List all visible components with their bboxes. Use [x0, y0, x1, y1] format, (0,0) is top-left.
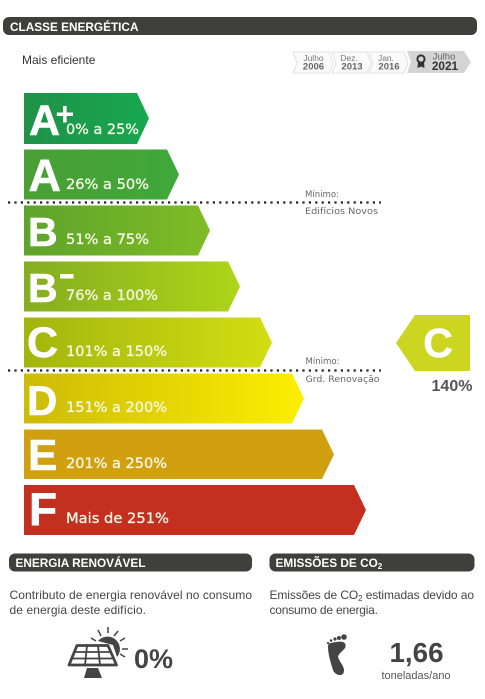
bar C: [24, 318, 272, 368]
minimum label: edifícios novos: [305, 190, 378, 217]
bar A: 26% a 50%: [66, 177, 149, 193]
bar B-: B: [28, 265, 58, 311]
description: emissions: consumo de energia.: [270, 603, 378, 617]
icon: award ribbon: [417, 55, 425, 68]
value: 0%: 0%: [134, 644, 173, 674]
header: energia renovável: ENERGIA RENOVÁVEL: [16, 556, 146, 570]
panel: emissões de co2: [270, 554, 474, 682]
description: emissions: estimadas devido ao: [362, 588, 474, 602]
bar A+: [24, 93, 149, 145]
header: emissões: 2: [378, 562, 383, 571]
header: emissões: EMISSÕES DE CO: [276, 556, 378, 570]
bar D: 151% a 200%: [66, 400, 167, 416]
header: emissões: [270, 554, 474, 572]
regulation timeline: [293, 51, 471, 73]
tab: julho 2021 active: [407, 51, 471, 73]
bar F: F: [29, 483, 57, 535]
minimum label: grande renovação: Grd. Renovação: [306, 375, 380, 385]
value: 140%: 140%: [432, 378, 472, 395]
bar C: C: [27, 319, 58, 367]
tab: janeiro 2016: Jan.: [378, 53, 394, 63]
description: emissions: Emissões de CO: [270, 588, 358, 602]
tab: dezembro 2013: 2013: [341, 62, 363, 72]
bar E: 201% a 250%: [66, 456, 167, 472]
bar F: [24, 483, 366, 535]
description: renewable: [10, 588, 252, 617]
bar A+: +: [56, 96, 74, 132]
tab: julho 2006: Julho: [303, 53, 324, 63]
current class indicator: [396, 315, 470, 371]
header: energia renovável: [9, 554, 252, 572]
value: 1,66: 1,66: [390, 637, 444, 668]
bar F: Mais de 251%: [66, 511, 169, 527]
description: emissions: 2: [358, 594, 363, 603]
bar D: [24, 374, 304, 424]
tab: julho 2021 active: Julho: [433, 52, 455, 62]
tab: julho 2006: [293, 52, 333, 73]
header: classe energética: CLASSE ENERGÉTICA: [10, 20, 139, 34]
tab: julho 2021 active: 2021: [432, 59, 459, 73]
tab: dezembro 2013: Dez.: [340, 53, 358, 63]
panel: energia renovável: [9, 554, 252, 678]
bar B: 51% a 75%: [66, 232, 149, 248]
bar A+: A: [29, 97, 60, 145]
bar D: D: [27, 377, 57, 424]
icon: footprint: [327, 634, 347, 675]
bar B-: [24, 262, 240, 312]
bar E: [24, 430, 334, 480]
bar B: B: [28, 209, 58, 255]
bar A+: 0% a 25%: [66, 122, 139, 138]
tab: dezembro 2013: [332, 52, 371, 73]
bar E: E: [28, 431, 57, 480]
header: classe energética: [3, 17, 477, 35]
energy class bars: [24, 93, 366, 535]
bar A: [24, 150, 179, 201]
minimum label: grande renovação: [306, 357, 380, 385]
description: renewable: Contributo de energia renovável no consumo: [10, 588, 252, 602]
bar B-: 76% a 100%: [66, 288, 158, 304]
tab: janeiro 2016: [369, 52, 408, 73]
description: emissions: [270, 588, 474, 617]
bar C: 101% a 150%: [66, 344, 167, 360]
minimum label: grande renovação: Mínimo:: [306, 357, 340, 367]
description: renewable: de energia deste edifício.: [10, 603, 146, 617]
label: mais eficiente: Mais eficiente: [22, 53, 96, 67]
minimum label: edifícios novos: Mínimo:: [305, 190, 339, 200]
minimum label: edifícios novos: Edifícios Novos: [305, 207, 378, 217]
icon: solar panel with sun: [69, 627, 128, 678]
bar A: A: [28, 150, 61, 201]
current class indicator: C: [423, 320, 453, 366]
tab: julho 2006: 2006: [303, 62, 324, 72]
tab: janeiro 2016: 2016: [378, 62, 400, 72]
unit: toneladas/ano: toneladas/ano: [381, 670, 451, 682]
bar B: [24, 206, 210, 256]
